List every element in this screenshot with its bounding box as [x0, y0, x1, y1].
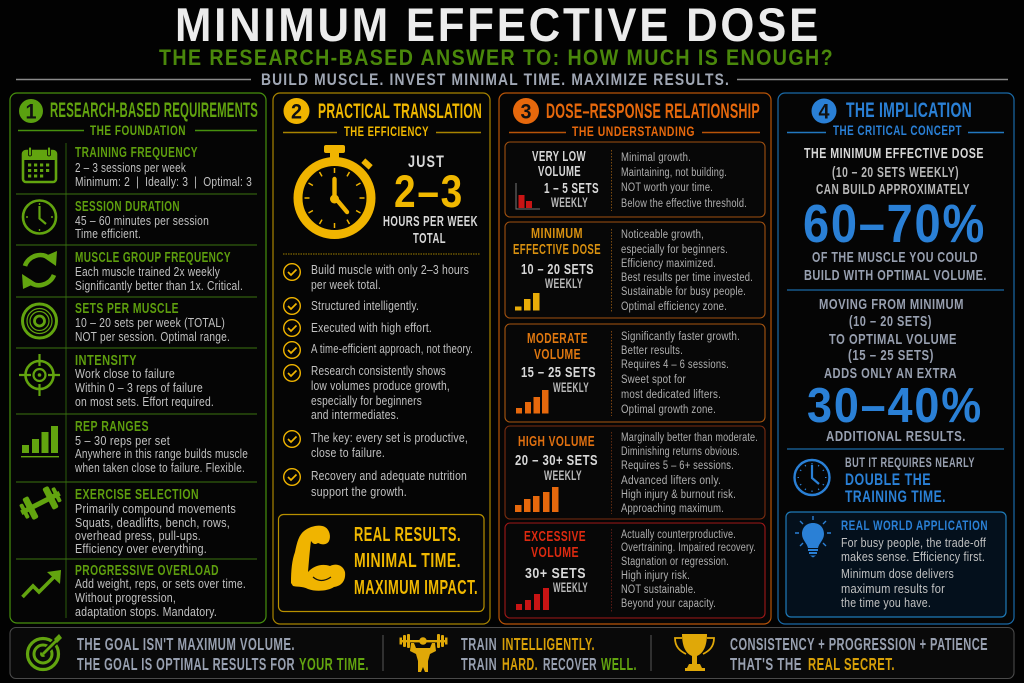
footer message: train: WELL. [601, 654, 637, 674]
checklist: especially for beginners [311, 394, 422, 408]
stat: 30-40 percent: 30–40% [807, 379, 983, 433]
card: moderate volume: Requires 4 – 6 sessions. [621, 359, 729, 371]
row: training frequency: TRAINING FREQUENCY [75, 145, 198, 161]
row: intensity: INTENSITY [75, 353, 137, 369]
row: training frequency: Minimum: 2 | Ideally: 3 | Optimal: 3 [75, 175, 252, 189]
row: progressive overload [75, 563, 246, 619]
panel: research-based requirements [10, 93, 266, 623]
statement: additional results: ADDITIONAL RESULTS. [826, 428, 966, 445]
checklist: close to failure. [311, 446, 385, 460]
card: moderate volume: VOLUME [534, 347, 581, 363]
panel 1 heading: RESEARCH-BASED REQUIREMENTS [50, 99, 258, 122]
card: high volume: Approaching maximum. [621, 503, 724, 515]
panel 3 heading: DOSE–RESPONSE RELATIONSHIP [546, 100, 760, 123]
card: minimum effective dose: Efficiency maximized. [621, 258, 716, 270]
card: excessive volume: High injury risk. [621, 570, 690, 582]
footer message: goal: THE GOAL ISN'T MAXIMUM VOLUME. [77, 634, 295, 654]
row: muscle group frequency: Significantly better than 1x. Critical. [75, 279, 243, 293]
row: progressive overload: Without progression, [75, 591, 176, 605]
panel 4 heading: 4 [818, 100, 830, 124]
card: very low volume [505, 142, 765, 217]
panel 3 heading: 3 [520, 100, 532, 124]
panel 1 subheading: THE FOUNDATION [90, 122, 186, 138]
footer message: goal [77, 634, 369, 674]
row: session duration: SESSION DURATION [75, 199, 180, 215]
panel: practical translation [273, 93, 490, 624]
footer message: train: TRAIN [461, 654, 497, 674]
callout: real results: MINIMAL TIME. [354, 550, 461, 572]
callout: real world application: makes sense. Efficiency first. [841, 550, 985, 564]
card: minimum effective dose: WEEKLY [545, 276, 583, 291]
checklist: per week total. [311, 278, 381, 292]
row: intensity: Work close to failure [75, 367, 175, 381]
icon: flexed arm [291, 526, 345, 591]
chart: excessive bars [516, 588, 549, 610]
row: sets per muscle: SETS PER MUSCLE [75, 301, 179, 317]
footer message: goal: YOUR TIME. [299, 654, 369, 674]
row: muscle group frequency [75, 250, 243, 293]
panel 3 heading [513, 98, 760, 124]
card: moderate volume [505, 324, 765, 422]
panel: the implication [778, 93, 1014, 624]
panel 2 heading: PRACTICAL TRANSLATION [318, 100, 482, 123]
row: progressive overload: Add weight, reps, or sets over time. [75, 577, 246, 591]
chart: very low bars [516, 183, 540, 209]
icon: bullseye with arrow [28, 634, 62, 670]
icon: refresh arrows [22, 251, 57, 289]
row: rep ranges: 5 – 30 reps per set [75, 434, 170, 448]
card: minimum effective dose: Best results per time invested. [621, 272, 753, 284]
panel 2 heading [284, 98, 482, 124]
checklist: Build muscle with only 2–3 hours [311, 263, 469, 277]
card: very low volume: Below the effective threshold. [621, 198, 747, 210]
title: MINIMUM EFFECTIVE DOSE [175, 0, 821, 52]
row: progressive overload: adaptation stops. Mandatory. [75, 605, 217, 619]
stat: hours per week [383, 153, 478, 247]
row: session duration [75, 199, 209, 241]
card: very low volume: WEEKLY [551, 195, 588, 210]
card: high volume: Marginally better than moderate. [621, 432, 758, 444]
card: minimum effective dose [505, 222, 765, 318]
checklist: A time-efficient approach, not theory. [311, 342, 473, 356]
row: training frequency: 2 – 3 sessions per week [75, 161, 186, 175]
card: moderate volume: 15 – 25 SETS [521, 365, 596, 381]
card: high volume [505, 426, 765, 519]
footer message: consistency: REAL SECRET. [808, 654, 895, 674]
callout: real results: REAL RESULTS. [354, 524, 461, 546]
card: high volume: Diminishing returns obvious. [621, 446, 740, 458]
card: moderate volume: Better results. [621, 345, 683, 357]
panel 1 heading [19, 99, 258, 124]
card: excessive volume: Stagnation or regression. [621, 556, 729, 568]
statement: double the time [845, 455, 975, 506]
icon: light bulb [795, 516, 831, 558]
icon: dumbbell [16, 483, 65, 523]
row: exercise selection: EXERCISE SELECTION [75, 487, 199, 503]
statement: moving to optimal [819, 296, 964, 382]
icon: stopwatch [298, 145, 373, 234]
statement: optimal volume share [804, 249, 987, 284]
icon: crosshair [19, 354, 60, 396]
statement: moving to optimal: TO OPTIMAL VOLUME [829, 331, 957, 348]
panel 2 subheading: THE EFFICIENCY [344, 123, 429, 139]
subtitle: THE RESEARCH-BASED ANSWER TO: HOW MUCH IS ENOUGH? [159, 45, 834, 70]
card: moderate volume: WEEKLY [553, 380, 589, 395]
card: excessive volume: Actually counterproductive. [621, 529, 736, 541]
checklist: The key: every set is productive, [311, 431, 468, 445]
row: sets per muscle [75, 301, 230, 344]
card: moderate volume: Sweet spot for [621, 374, 686, 386]
row: rep ranges: Anywhere in this range builds muscle [75, 447, 248, 461]
chart: minimum dose bars [515, 293, 540, 310]
panel 2 heading: 2 [291, 100, 302, 124]
row: exercise selection: overhead press, pull-ups. [75, 529, 201, 543]
callout: real world application: Minimum dose delivers [841, 567, 954, 581]
statement: double the time: TRAINING TIME. [845, 487, 946, 506]
card: moderate volume: most dedicated lifters. [621, 389, 721, 401]
checklist: low volumes produce growth, [311, 379, 450, 393]
callout: real world application: the time you have. [841, 596, 931, 610]
card: very low volume: Minimal growth. [621, 152, 691, 164]
panel 4 heading [812, 98, 972, 124]
panel 1 heading: 1 [26, 100, 37, 124]
card: very low volume: VERY LOW [532, 149, 586, 165]
row: training frequency [75, 145, 252, 189]
card: excessive volume: 30+ SETS [525, 566, 586, 582]
statement: minimum dose [804, 146, 984, 198]
row: exercise selection: Efficiency over everything. [75, 542, 207, 556]
stat: hours per week: JUST [408, 153, 445, 171]
chart: high bars [515, 487, 558, 512]
card: excessive volume: EXCESSIVE [524, 529, 586, 545]
card: minimum effective dose: especially for beginners. [621, 244, 728, 256]
checklist: and intermediates. [311, 408, 399, 422]
row: muscle group frequency: Each muscle trained 2x weekly [75, 265, 220, 279]
callout: real results: MAXIMUM IMPACT. [354, 577, 478, 599]
stat: 60-70 percent: 60–70% [803, 194, 986, 254]
footer message: goal: THE GOAL IS OPTIMAL RESULTS FOR [77, 654, 295, 674]
card: moderate volume: MODERATE [527, 331, 588, 347]
icon: trophy [675, 634, 714, 671]
statement: moving to optimal: MOVING FROM MINIMUM [819, 296, 964, 313]
row: exercise selection: Squats, deadlifts, bench, rows, [75, 516, 230, 530]
statement: moving to optimal: ADDS ONLY AN EXTRA [824, 365, 957, 382]
panel 4 subheading: THE CRITICAL CONCEPT [833, 122, 962, 138]
icon: clock [23, 200, 56, 234]
card: excessive volume: VOLUME [531, 545, 579, 561]
statement: moving to optimal: (10 – 20 SETS) [849, 314, 932, 330]
footer message: train: INTELLIGENTLY. [502, 634, 595, 654]
card: minimum effective dose: Sustainable for busy people. [621, 286, 746, 298]
row: progressive overload: PROGRESSIVE OVERLOAD [75, 563, 219, 579]
checklist: Recovery and adequate nutrition [311, 469, 467, 483]
row: session duration: 45 – 60 minutes per session [75, 214, 209, 228]
statement: double the time: DOUBLE THE [845, 470, 931, 489]
card: minimum effective dose: 10 – 20 SETS [521, 262, 594, 278]
stat: hours per week: 2–3 [394, 166, 464, 217]
card: excessive volume: NOT sustainable. [621, 584, 696, 596]
footer message: consistency: THAT'S THE [730, 654, 802, 674]
card: high volume: Requires 5 – 6+ sessions. [621, 460, 734, 472]
card: high volume: HIGH VOLUME [518, 434, 595, 450]
row: muscle group frequency: MUSCLE GROUP FREQUENCY [75, 250, 231, 266]
checklist [284, 263, 473, 499]
callout: real world application: For busy people, the trade-off [841, 536, 986, 550]
statement: moving to optimal: (15 – 25 SETS) [848, 348, 934, 364]
card: moderate volume: Optimal growth zone. [621, 404, 716, 416]
callout: real results [278, 514, 484, 612]
icon: weightlifter [400, 634, 448, 672]
footer message: train: HARD. [502, 654, 538, 674]
icon: rising bars [21, 426, 59, 457]
card: excessive volume: WEEKLY [553, 580, 588, 595]
row: sets per muscle: 10 – 20 sets per week (TOTAL) [75, 316, 225, 330]
row: session duration: Time efficient. [75, 227, 141, 241]
tagline with rules: BUILD MUSCLE. INVEST MINIMAL TIME. MAXIMIZE RESULTS. [261, 71, 730, 89]
checklist: Research consistently shows [311, 364, 446, 378]
footer message: train [461, 634, 637, 674]
card: high volume: 20 – 30+ SETS [515, 453, 598, 469]
card: very low volume: Maintaining, not building. [621, 167, 727, 179]
chart: moderate bars [516, 390, 548, 414]
panel 3 subheading: THE UNDERSTANDING [572, 123, 695, 139]
card: very low volume: NOT worth your time. [621, 182, 713, 194]
card: very low volume: VOLUME [538, 164, 581, 180]
checklist: Executed with high effort. [311, 321, 432, 335]
icon: weight plate target [22, 304, 56, 338]
card: excessive volume [505, 523, 765, 618]
row: exercise selection [75, 487, 236, 556]
row: exercise selection: Primarily compound movements [75, 502, 236, 516]
card: high volume: WEEKLY [544, 468, 582, 483]
icon: calendar [23, 147, 56, 182]
row: intensity: Within 0 – 3 reps of failure [75, 381, 203, 395]
card: very low volume: 1 – 5 SETS [544, 181, 599, 197]
card: moderate volume: Significantly faster growth. [621, 331, 740, 343]
row: rep ranges [74, 419, 248, 475]
footer message: consistency [730, 634, 988, 674]
row: rep ranges: REP RANGES [75, 419, 149, 435]
callout: real world application [786, 512, 1006, 617]
stat: hours per week: HOURS PER WEEK [383, 213, 478, 230]
icon: growth arrow [22, 570, 61, 597]
footer message: train: RECOVER [543, 654, 597, 674]
stat: hours per week: TOTAL [413, 230, 446, 247]
card: excessive volume: Beyond your capacity. [621, 598, 716, 610]
row: rep ranges: when taken close to failure. Flexible. [74, 461, 245, 475]
footer banner [10, 628, 1014, 678]
card: high volume: High injury & burnout risk. [621, 489, 736, 501]
checklist: Structured intelligently. [311, 299, 419, 313]
card: excessive volume: Overtraining. Impaired recovery. [621, 542, 756, 554]
row: intensity [75, 353, 214, 409]
footer message: train: TRAIN [461, 634, 497, 654]
card: high volume: Advanced lifters only. [621, 475, 721, 487]
row: sets per muscle: NOT per session. Optimal range. [75, 330, 230, 344]
card: minimum effective dose: Noticeable growth, [621, 229, 704, 241]
card: minimum effective dose: MINIMUM [531, 226, 583, 242]
checklist: support the growth. [311, 485, 407, 499]
row: intensity: on most sets. Effort required. [75, 395, 214, 409]
callout: real world application: maximum results for [841, 582, 945, 596]
statement: minimum dose: (10 – 20 SETS WEEKLY) [832, 165, 959, 181]
card: minimum effective dose: EFFECTIVE DOSE [513, 242, 601, 258]
card: minimum effective dose: Optimal efficiency zone. [621, 301, 727, 313]
icon: blue clock [794, 460, 830, 495]
panel: dose-response relationship [499, 93, 771, 624]
